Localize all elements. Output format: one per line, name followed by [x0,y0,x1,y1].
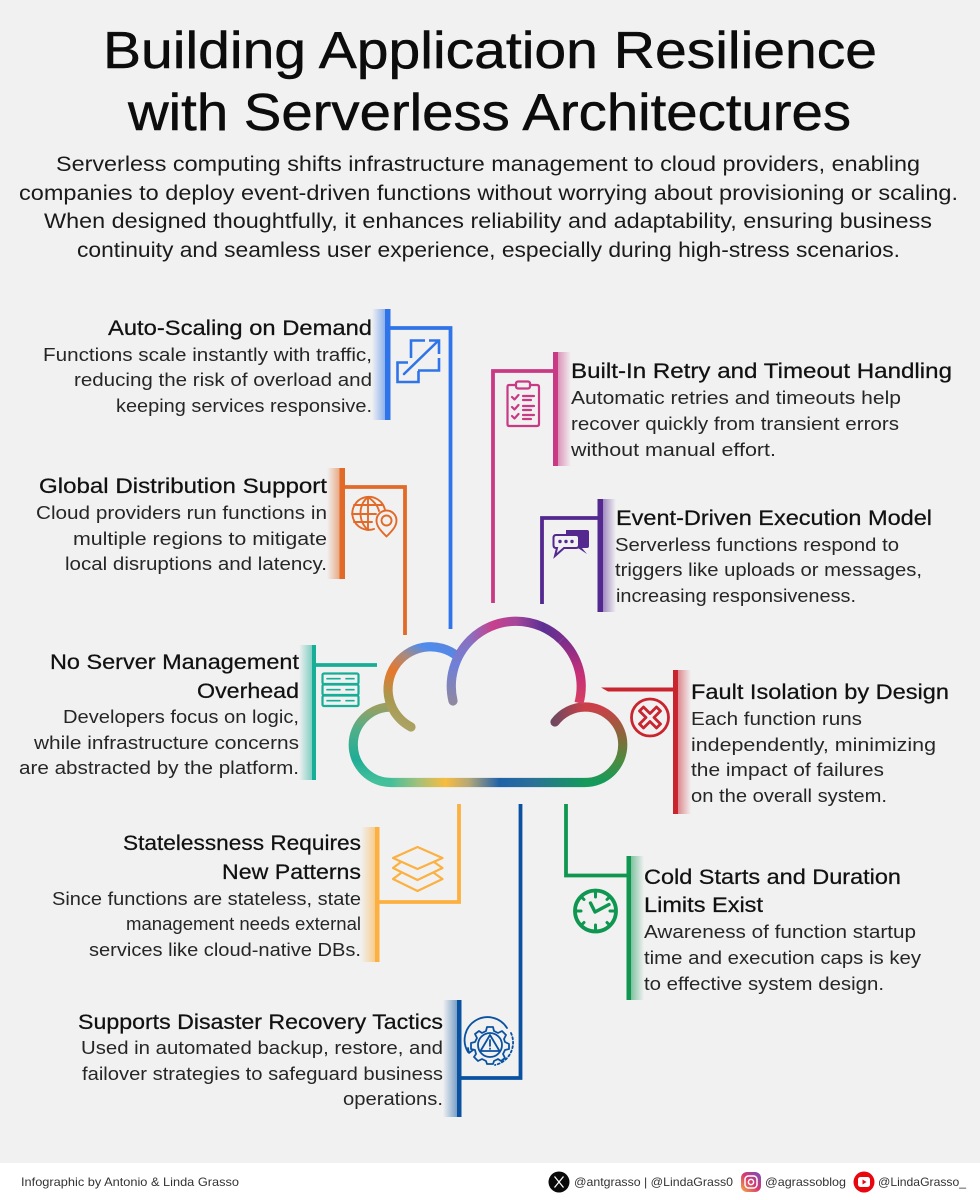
intro paragraph: Serverless computing shifts infrastructure management to cloud providers, enabling [56,153,920,176]
footer bar [0,1163,980,1200]
panel: built-in retry and timeout handling: without manual effort. [570,439,776,460]
panel: no server management overhead [19,645,377,780]
panel: global distribution support: Cloud providers run functions in [36,502,327,523]
panel: global distribution support: local disruptions and latency. [65,553,327,574]
panel: cold starts and duration limits exist: Limits Exist [644,894,763,917]
panel: statelessness requires new patterns: Since functions are stateless, state [52,888,361,909]
x handles: @antgrasso | @LindaGrass0 [574,1175,733,1189]
panel: event-driven execution model: Event-Driven Execution Model [616,507,932,530]
instagram handle: @agrassoblog [765,1175,846,1189]
panel: event-driven execution model: increasing responsiveness. [616,585,856,606]
panel: event-driven execution model: triggers like uploads or messages, [615,559,922,580]
panel: no server management overhead: while infrastructure concerns [33,732,299,753]
panel: fault isolation by design: on the overall system. [691,785,887,806]
panel: event-driven execution model: Serverless functions respond to [615,534,899,555]
panel: no server management overhead: are abstracted by the platform. [19,757,299,778]
panel: fault isolation by design: Each function runs [691,708,862,729]
panel: no server management overhead: No Server Management [50,651,299,674]
panel: fault isolation by design: Fault Isolation by Design [691,681,949,704]
panel: fault isolation by design [601,670,949,814]
panel: built-in retry and timeout handling: recover quickly from transient errors [571,413,899,434]
panel: auto-scaling on demand: Functions scale instantly with traffic, [43,344,372,365]
panel: built-in retry and timeout handling [493,352,952,603]
panel: auto-scaling on demand: Auto-Scaling on Demand [108,317,372,340]
icon: server stack [322,674,358,706]
panel: built-in retry and timeout handling: Built-In Retry and Timeout Handling [571,360,952,383]
icon: expand arrows [398,340,439,382]
panel: cold starts and duration limits exist: Cold Starts and Duration [644,866,901,889]
title [103,22,877,142]
panel: fault isolation by design: independently, minimizing [691,734,936,755]
panel: statelessness requires new patterns: services like cloud-native DBs. [89,939,361,960]
panel: no server management overhead: Overhead [197,680,299,703]
panel: global distribution support [36,468,405,635]
intro paragraph [19,153,958,262]
panel: cold starts and duration limits exist: Awareness of function startup [644,921,916,942]
icon: globe with location pin [352,497,396,536]
panel: statelessness requires new patterns: Statelessness Requires [123,832,361,855]
panel: fault isolation by design: the impact of failures [691,759,884,780]
panel: statelessness requires new patterns: management needs external [126,913,361,934]
panel: cold starts and duration limits exist: to effective system design. [644,973,884,994]
panel: auto-scaling on demand: keeping services responsive. [116,395,372,416]
icon: chat bubbles [554,530,589,556]
panel: auto-scaling on demand: reducing the risk of overload and [74,369,372,390]
intro paragraph: continuity and seamless user experience, especially during high-stress scenarios. [77,239,900,262]
icon: x logo [548,1172,570,1192]
icon: stacked layers [393,847,442,891]
icon: instagram logo [741,1172,761,1192]
icon: x in circle [632,699,668,736]
panel: statelessness requires new patterns: New Patterns [222,861,361,884]
title: Building Application Resilience [103,22,877,80]
icon: clock [575,890,616,932]
intro paragraph: When designed thoughtfully, it enhances reliability and adaptability, ensuring business [44,210,932,233]
panel: global distribution support: multiple regions to mitigate [73,528,327,549]
title: with Serverless Architectures [127,84,851,142]
intro paragraph: companies to deploy event-driven functions without worrying about provisioning or scaling. [19,182,958,205]
panel: cold starts and duration limits exist: time and execution caps is key [644,947,922,968]
central rainbow cloud [353,621,623,782]
panel: no server management overhead: Developers focus on logic, [63,706,299,727]
footer credit: Infographic by Antonio & Linda Grasso [21,1175,239,1189]
panel: supports disaster recovery tactics: Supports Disaster Recovery Tactics [78,1011,443,1034]
panel: supports disaster recovery tactics: Used in automated backup, restore, and [81,1037,443,1058]
youtube handle: @LindaGrasso_ [878,1175,966,1189]
panel: statelessness requires new patterns [52,804,459,962]
panel: event-driven execution model [542,499,932,612]
panel: supports disaster recovery tactics: operations. [343,1088,443,1109]
panel: auto-scaling on demand [43,309,450,629]
panel: cold starts and duration limits exist [566,804,922,1000]
panel: built-in retry and timeout handling: Automatic retries and timeouts help [571,387,901,408]
panel: supports disaster recovery tactics: failover strategies to safeguard business [82,1063,443,1084]
icon: clipboard checklist [508,382,539,426]
panel: global distribution support: Global Distribution Support [39,475,327,498]
panel: supports disaster recovery tactics [78,804,520,1117]
icon: gear with warning [465,1017,513,1065]
icon: youtube logo [854,1172,874,1192]
